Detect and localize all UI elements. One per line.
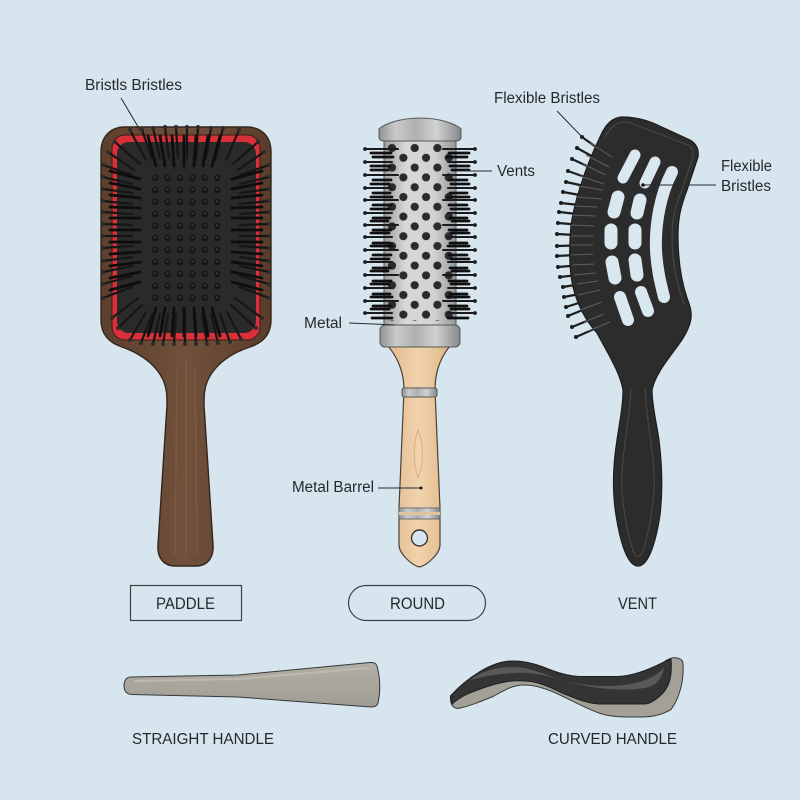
label: metal xyxy=(304,315,395,332)
vent slots xyxy=(611,155,672,320)
round caption pill xyxy=(348,586,486,620)
red cushion ring xyxy=(112,135,260,340)
centre bristle pins xyxy=(149,172,223,304)
paddle brush xyxy=(101,127,271,566)
inner thick bristles xyxy=(110,136,262,336)
vent brush xyxy=(557,117,698,566)
curved handle xyxy=(450,658,683,717)
label: flexible bristles, vent top xyxy=(494,90,600,140)
straight handle xyxy=(124,662,380,707)
round caption pill: ROUND xyxy=(390,595,445,613)
black bristle pad xyxy=(117,142,256,333)
body highlight xyxy=(605,122,693,557)
mid grey sheen xyxy=(470,667,664,690)
label: metal: Metal xyxy=(304,315,342,332)
vent caption: VENT xyxy=(618,595,657,613)
vent body and handle xyxy=(570,117,698,566)
label: vents xyxy=(465,163,535,180)
bristle tips xyxy=(365,149,475,313)
outer bristles xyxy=(103,127,269,344)
label: vents: Vents xyxy=(497,163,535,180)
top cap xyxy=(379,118,461,141)
label: flexible bristles, vent side: Bristles xyxy=(721,178,771,195)
vent holes xyxy=(386,143,454,321)
bristle tips xyxy=(103,127,269,344)
bottom collar xyxy=(380,325,460,347)
paddle body and handle xyxy=(101,127,271,566)
label: bristles, paddle xyxy=(85,77,182,130)
label: flexible bristles, vent top: Flexible Bristles xyxy=(494,90,600,107)
bristles on the body xyxy=(571,143,612,331)
label: metal barrel xyxy=(292,479,422,496)
label: flexible bristles, vent side xyxy=(641,158,772,195)
curved handle caption: CURVED HANDLE xyxy=(548,731,677,748)
round brush xyxy=(365,118,475,567)
grey underside xyxy=(450,658,683,717)
clustered bristles xyxy=(371,153,469,318)
vent bristles outside the body xyxy=(557,137,610,337)
straight handle caption: STRAIGHT HANDLE xyxy=(132,731,274,748)
label: flexible bristles, vent side: Flexible xyxy=(721,158,772,175)
handle rings xyxy=(402,388,437,397)
vent bristle tips xyxy=(557,137,582,337)
handle xyxy=(388,346,450,567)
hanging hole xyxy=(412,530,428,546)
metal barrel xyxy=(384,138,456,328)
side bristles xyxy=(365,149,475,313)
dark top layer xyxy=(450,659,671,704)
label: bristles, paddle: Bristls Bristles xyxy=(85,77,182,94)
label: metal barrel: Metal Barrel xyxy=(292,479,374,496)
paddle caption box xyxy=(130,586,242,620)
paddle caption box: PADDLE xyxy=(156,595,215,613)
